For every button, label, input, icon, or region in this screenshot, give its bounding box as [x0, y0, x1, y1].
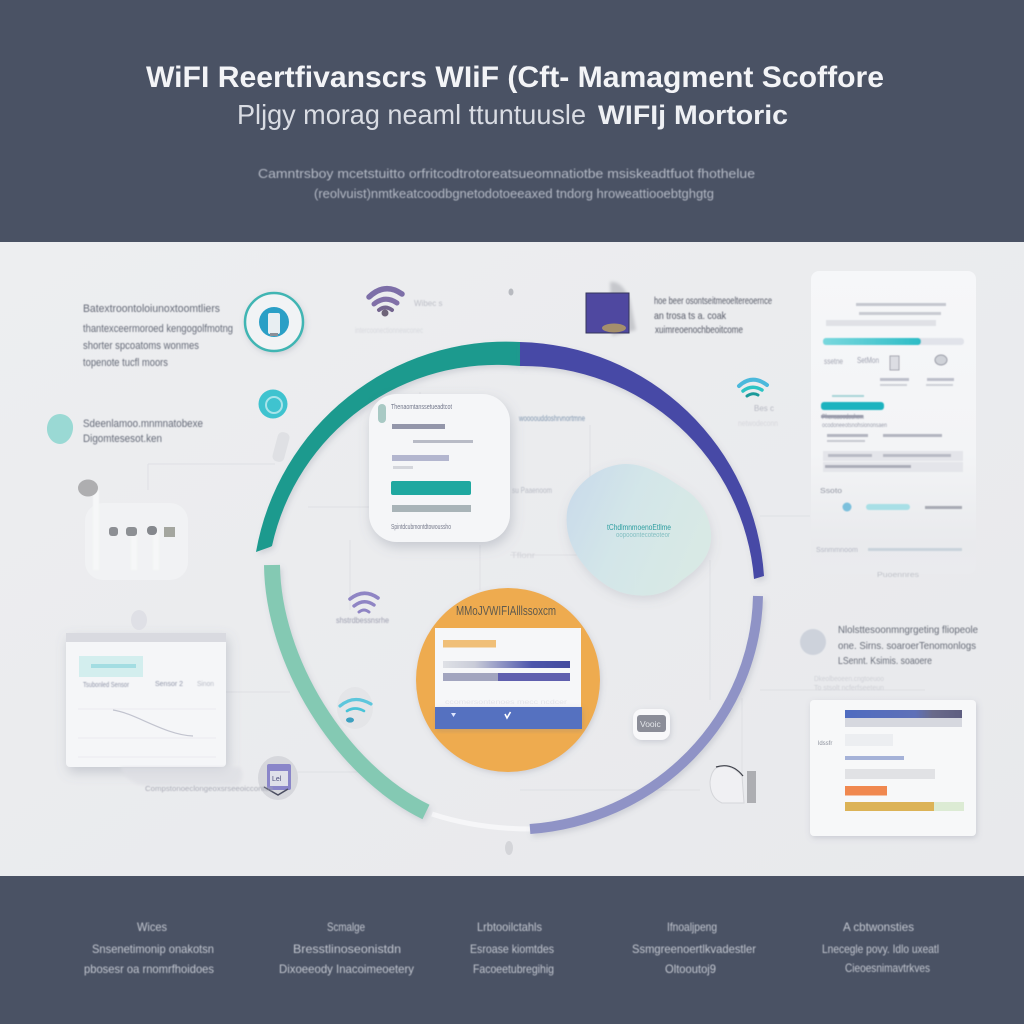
teal button	[391, 481, 471, 495]
column 3: Facoeetubregihig	[473, 962, 554, 976]
column 5: Cieoesnimavtrkves	[845, 961, 930, 975]
icon: mint badge	[47, 414, 73, 444]
panel: line chart window: Sinon	[197, 679, 214, 688]
callout: right lower: Nlolsttesoonmngrgeting fliopeole	[838, 624, 978, 636]
description	[258, 166, 755, 201]
ring: inner white lower arc	[432, 814, 540, 829]
label: wifi teal	[738, 404, 778, 428]
callout: top left: thantexceermoroed kengogolfmotng	[83, 323, 233, 335]
column 1: pbosesr oa rnomrfhoidoes	[84, 962, 214, 976]
icon: wifi teal lower	[337, 687, 373, 729]
column 2: Bresstlinoseonistdn	[293, 942, 401, 956]
icon: purple folder	[586, 282, 636, 336]
subtitle	[237, 99, 788, 130]
column 2: Scmalge	[327, 920, 365, 934]
panel: bar chart card: ldssfr	[818, 741, 832, 747]
icon: wifi teal	[739, 380, 767, 396]
column 1: Snsenetimonip onakotsn	[92, 942, 214, 956]
panel: orange dashboard circle	[416, 588, 600, 772]
callout: top left	[83, 303, 233, 369]
panel: center form card: Thenaomtanssetueadtcot	[391, 404, 452, 411]
ring: periwinkle arc	[530, 596, 758, 829]
faint mid labels: su Paaenoom	[512, 485, 552, 495]
callout: top left: topenote tucfl moors	[83, 357, 168, 369]
column 1	[84, 920, 214, 976]
column 5: Lnecegle povy. Idlo uxeatl	[822, 942, 939, 956]
dashboard card	[435, 628, 582, 729]
column 4: Ssmgreenoertlkvadestler	[632, 942, 756, 956]
icon: side tab on arc	[271, 431, 291, 463]
callout: top right: an trosa ts a. coak	[654, 310, 727, 322]
panel: tall report: ocodoneeotsnohsiononsaen	[822, 423, 887, 429]
label: wifi purple top: Wibec s	[414, 299, 442, 308]
panel: cloud blob	[567, 464, 711, 596]
faint mid labels: Tflonr	[511, 550, 535, 560]
panel: tall report	[811, 271, 976, 579]
icon: faint pin	[131, 610, 147, 630]
label: wifi purple top	[355, 299, 442, 335]
panel: cloud blob: oopooontecoteoteor	[616, 532, 671, 539]
icon: meter chip	[633, 709, 670, 740]
callout: right lower: one. Sirns. soaroerTenomonlogs	[838, 640, 976, 652]
column 2: Dixoeeody Inacoimeoetery	[279, 962, 414, 976]
icon: wifi purple top	[369, 289, 402, 316]
panel: tall report: ssetne	[824, 357, 843, 366]
column 5	[822, 920, 939, 975]
callout: left middle: Digomtesesot.ken	[83, 433, 162, 445]
icon: outlined gadget	[710, 766, 756, 803]
title: WiFI Reertfivanscrs WIiF (Cft- Mamagment Scoffore	[146, 61, 884, 94]
panel: cloud blob: tChdlmnmoenoEtllme	[607, 522, 671, 532]
column 4	[632, 920, 756, 976]
callout: top left: shorter spcoatoms wonmes	[83, 340, 199, 352]
panel: tall report: Ssnmmnoom	[816, 545, 858, 554]
panel: center form card: Spintdcubmontdtowoussho	[391, 524, 451, 531]
callout: top right	[654, 295, 772, 336]
footer band	[0, 876, 1024, 1024]
connector grid lines	[148, 392, 925, 790]
icon: meter chip: Vooic	[640, 719, 662, 729]
panel: center form card	[369, 394, 510, 542]
label: wifi purple mid: shstrdbessnsrhe	[336, 616, 389, 625]
callout: right lower: To stsolt ncferfseeteun	[814, 683, 884, 692]
column 3	[470, 920, 554, 976]
column 2	[279, 920, 414, 976]
subtitle: WIFIj Mortoric	[598, 100, 788, 130]
column 3: Esroase kiomtdes	[470, 942, 554, 956]
column 5: A cbtwonsties	[843, 920, 914, 934]
ring: teal arc	[256, 342, 520, 552]
panel: tall report: Ssoto	[820, 488, 842, 495]
ring: mint arc	[272, 565, 426, 812]
callout: right lower: Dkeolbeoeen.cngtoeuoo	[814, 674, 884, 683]
column 3: Lrbtooilctahls	[477, 920, 542, 934]
column 4: Ifnoaljpeng	[667, 920, 717, 934]
ring: indigo arc	[520, 342, 764, 579]
column 1: Wices	[137, 920, 167, 934]
panel: bar chart card	[810, 700, 976, 836]
callout: top right: hoe beer osontseitmeoeltereoernce	[654, 295, 772, 307]
callout: left middle: Sdeenlamoo.mnmnatobexe	[83, 418, 203, 430]
main background	[0, 242, 1024, 876]
heading: MMoJVWIFIAlllssoxcm	[456, 603, 556, 618]
faint mid labels	[511, 413, 585, 560]
panel: tall report: Phensaoodsuhem	[822, 414, 864, 421]
callout: right lower: LSennt. Ksimis. soaoere	[838, 655, 932, 667]
callout: right lower	[800, 624, 978, 692]
icon: hardware hub	[78, 480, 188, 580]
panel: line chart window: Tsubonled Sensor	[83, 680, 129, 689]
icon: small dot top	[508, 288, 514, 296]
subtitle: Pljgy morag neaml ttuntuusle	[237, 99, 586, 130]
icon: grey dot	[800, 629, 826, 655]
icon: wifi purple mid	[350, 593, 378, 612]
icon: router badge	[245, 293, 303, 351]
panel: tall report: Puoennres	[877, 572, 920, 579]
label: wifi purple top: intercoonectionnewconec	[355, 326, 423, 335]
description: Camntrsboy mcetstuitto orfritcodtrotoreatsueomnatiotbe msiskeadtfuot fhothelue	[258, 166, 755, 181]
icon: teal badge	[258, 390, 288, 418]
panel: line chart window: Sensor 2	[155, 679, 183, 688]
label: calendar device: Compstonoeclongeoxsrseeoiccontos	[145, 784, 273, 793]
column 4: Oltooutoj9	[665, 962, 716, 976]
icon: calendar device	[258, 756, 298, 800]
label: wifi teal: netwodeconn	[738, 419, 778, 428]
icon: small dot bottom	[505, 841, 513, 855]
callout: top right: xuimreoenochbeoitcome	[655, 324, 743, 336]
panel: line chart window	[66, 633, 226, 767]
dashboard card: ccomersontenoes mecc ncdcer	[445, 700, 567, 706]
callout: left middle	[83, 418, 203, 445]
panel: tall report: SetMon	[857, 356, 879, 365]
faint mid labels: woooouddoshrvnortmne	[518, 413, 585, 423]
shadow stack under chart window	[120, 767, 243, 786]
header band	[0, 0, 1024, 242]
icon: calendar device: Lel	[272, 776, 282, 783]
line chart	[78, 709, 216, 757]
label: wifi teal: Bes c	[754, 404, 774, 413]
description: (reolvuist)nmtkeatcoodbgnetodotoeeaxed tndorg hroweattiooebtghgtg	[314, 186, 714, 201]
callout: top left: Batextroontoloiunoxtoomtliers	[83, 303, 220, 315]
